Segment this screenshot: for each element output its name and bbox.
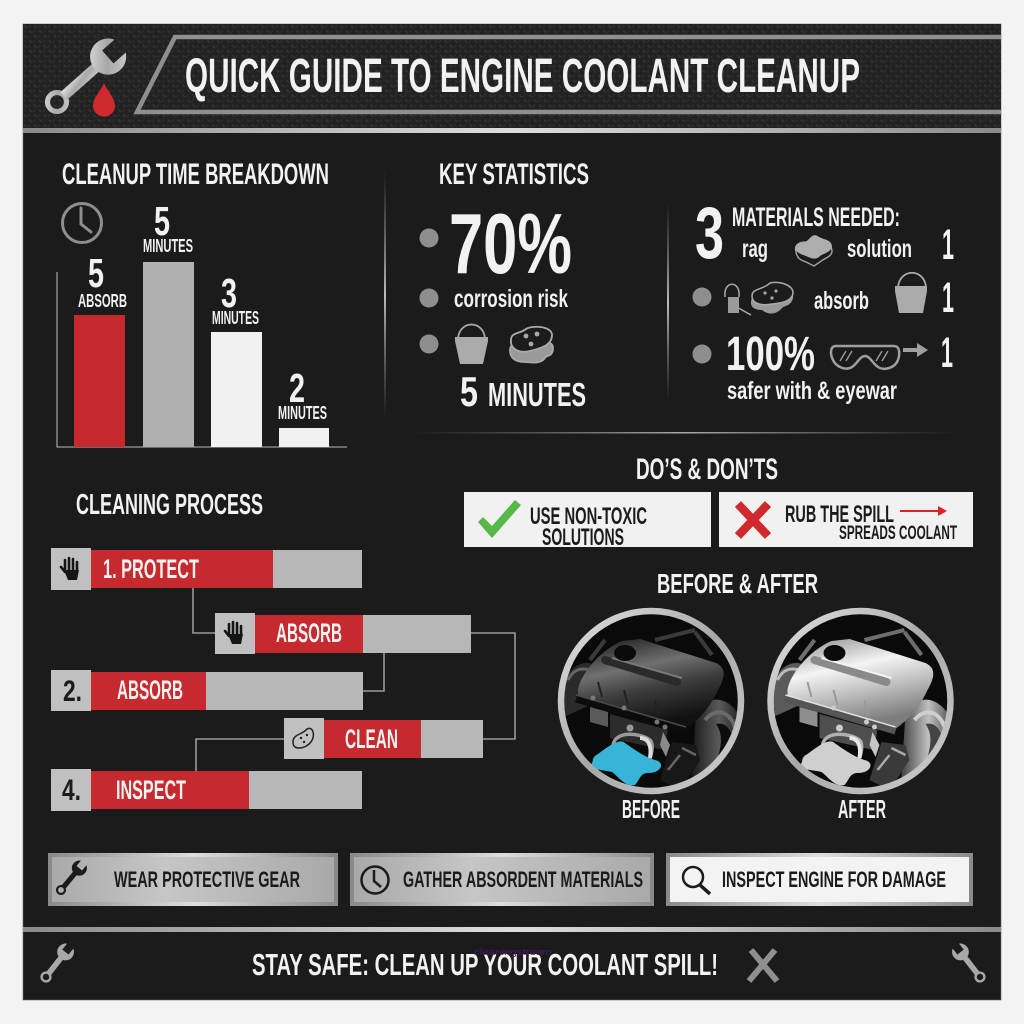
step: 4 inspect xyxy=(51,769,362,811)
step: 2 absorb: ABSORB xyxy=(117,675,183,705)
photo: engine before xyxy=(561,611,746,791)
step: absorb with icon: ABSORB xyxy=(276,618,342,648)
button: wear protective gear xyxy=(50,855,336,904)
stat: 3 materials needed: solution xyxy=(847,235,912,263)
stat: 3 materials needed: MATERIALS NEEDED: xyxy=(732,202,900,232)
heading: before and after: BEFORE & AFTER xyxy=(657,568,818,599)
label: before: BEFORE xyxy=(622,794,680,824)
stat: corrosion risk: corrosion risk xyxy=(454,285,568,313)
stat: 3 materials needed xyxy=(695,193,954,274)
bar chart: MINUTES xyxy=(212,308,259,328)
do card: USE NON-TOXIC xyxy=(530,503,647,530)
stat: 70 percent xyxy=(420,197,572,292)
panel: cleaning process xyxy=(51,489,515,811)
bar chart: ABSORB xyxy=(78,291,127,311)
bar chart: 3 xyxy=(221,270,237,316)
don't card xyxy=(719,492,973,547)
divider xyxy=(384,170,386,420)
stat: 3 materials needed: 1 xyxy=(942,221,954,269)
heading: cleaning process: CLEANING PROCESS xyxy=(76,489,263,521)
step: 4 inspect: INSPECT xyxy=(116,775,186,805)
button: inspect engine for damage xyxy=(668,855,971,904)
panel: key statistics xyxy=(420,158,589,415)
stat: 5 minutes: 5 xyxy=(460,368,478,415)
row: 100 percent safer: 1 xyxy=(941,329,953,377)
button: wear protective gear: WEAR PROTECTIVE GEAR xyxy=(114,867,300,892)
bar chart: MINUTES xyxy=(278,403,327,423)
panel: cleanup time breakdown xyxy=(57,158,347,447)
panel: before and after xyxy=(561,568,956,824)
stat: 5 minutes xyxy=(460,368,586,415)
stat: 3 materials needed: rag xyxy=(742,235,768,263)
row: absorb xyxy=(692,273,954,322)
row: absorb: 1 xyxy=(942,274,954,322)
label: after: AFTER xyxy=(838,794,886,824)
icon: crossed tools xyxy=(749,950,777,981)
connectors xyxy=(193,588,515,771)
row: 100 percent safer: 100% xyxy=(726,328,815,381)
title frame xyxy=(137,37,1001,112)
bar chart: 2 xyxy=(289,365,305,411)
icon: clock xyxy=(62,204,102,242)
step: 1 protect: 1. PROTECT xyxy=(103,554,199,584)
panel: materials needed xyxy=(692,193,954,405)
divider xyxy=(410,432,960,434)
step: clean xyxy=(284,718,483,759)
icon: left wrench xyxy=(36,941,77,987)
row: absorb: absorb xyxy=(814,287,869,315)
bar chart xyxy=(57,198,347,447)
step: 4 inspect: 4. xyxy=(62,774,81,807)
button: gather absorbent materials xyxy=(352,855,652,904)
bar chart: 5 xyxy=(88,250,104,296)
don't card: RUB THE SPILL xyxy=(785,501,894,528)
footer xyxy=(23,927,1001,987)
faint overprint: cleaningstream xyxy=(474,947,552,957)
stat: 3 materials needed: 3 xyxy=(695,193,724,274)
header band xyxy=(23,24,1001,133)
stat: 70 percent: 70% xyxy=(449,197,572,292)
icon: sponge xyxy=(510,327,553,363)
panel: do's and don'ts xyxy=(464,453,973,551)
row: 100 percent safer: safer with & eyewar xyxy=(727,377,897,405)
heading: do's and don'ts: DO’S & DON’TS xyxy=(636,453,778,486)
do card xyxy=(464,492,711,551)
bar chart: MINUTES xyxy=(143,236,193,256)
icon: bucket xyxy=(420,324,488,364)
step: 1 protect xyxy=(51,548,362,590)
heading: key statistics: KEY STATISTICS xyxy=(439,158,589,191)
stat: corrosion risk xyxy=(420,285,568,313)
footer message: STAY SAFE: CLEAN UP YOUR COOLANT SPILL! xyxy=(252,947,718,982)
icon: sponge xyxy=(795,235,832,266)
icon: right wrench xyxy=(949,941,990,987)
divider xyxy=(667,203,669,402)
icon: wrench and red drop xyxy=(36,33,132,123)
stat: 5 minutes: MINUTES xyxy=(488,376,586,413)
step: clean: CLEAN xyxy=(345,724,398,754)
photo: engine after xyxy=(770,611,956,791)
heading: cleanup time breakdown: CLEANUP TIME BREAKDOWN xyxy=(62,158,329,191)
step: 2 absorb: 2. xyxy=(63,675,82,708)
step: 2 absorb xyxy=(51,670,363,711)
bar chart: 5 xyxy=(154,198,170,244)
step: absorb with icon xyxy=(215,613,471,654)
button: gather absorbent materials: GATHER ABSORDENT MATERIALS xyxy=(403,867,643,892)
do card: SOLUTIONS xyxy=(542,524,624,551)
row: 100 percent safer xyxy=(692,328,953,405)
